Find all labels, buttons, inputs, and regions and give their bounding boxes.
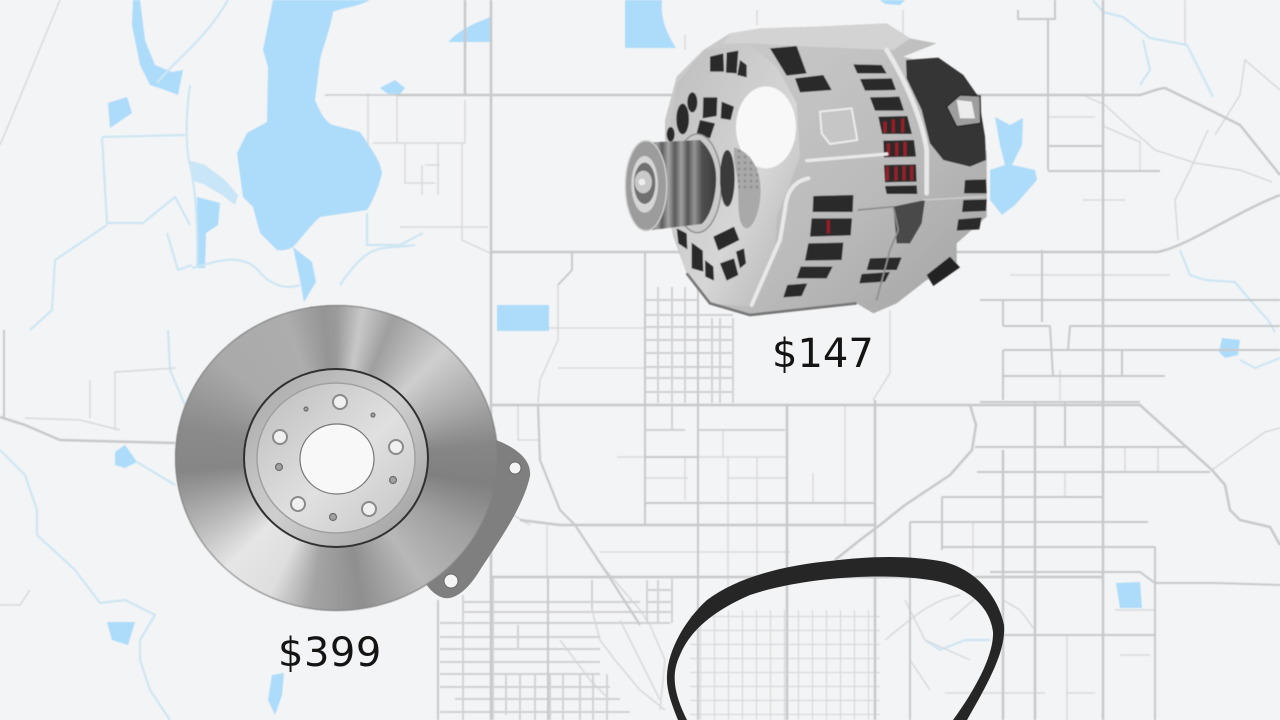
red stator windings xyxy=(828,118,912,233)
alternator lower rim xyxy=(687,273,857,315)
housing ridges xyxy=(752,50,985,305)
rotor disc xyxy=(175,305,498,611)
grooved pulley xyxy=(652,140,716,230)
price: alternator: $147 xyxy=(772,331,874,377)
pulley front xyxy=(625,141,667,231)
alternator white face highlight xyxy=(736,86,796,168)
top and side vents xyxy=(667,46,987,297)
price: brake rotor: $399 xyxy=(278,630,382,676)
perforated vent patch xyxy=(734,147,761,228)
pulley flange xyxy=(673,134,721,233)
alternator housing xyxy=(665,23,987,315)
alternator top surface xyxy=(723,23,910,50)
nameplate xyxy=(820,108,857,144)
terminal post xyxy=(947,95,981,127)
black rear cover xyxy=(906,58,986,167)
alternator front face xyxy=(667,45,800,307)
electrical connector xyxy=(927,257,960,286)
